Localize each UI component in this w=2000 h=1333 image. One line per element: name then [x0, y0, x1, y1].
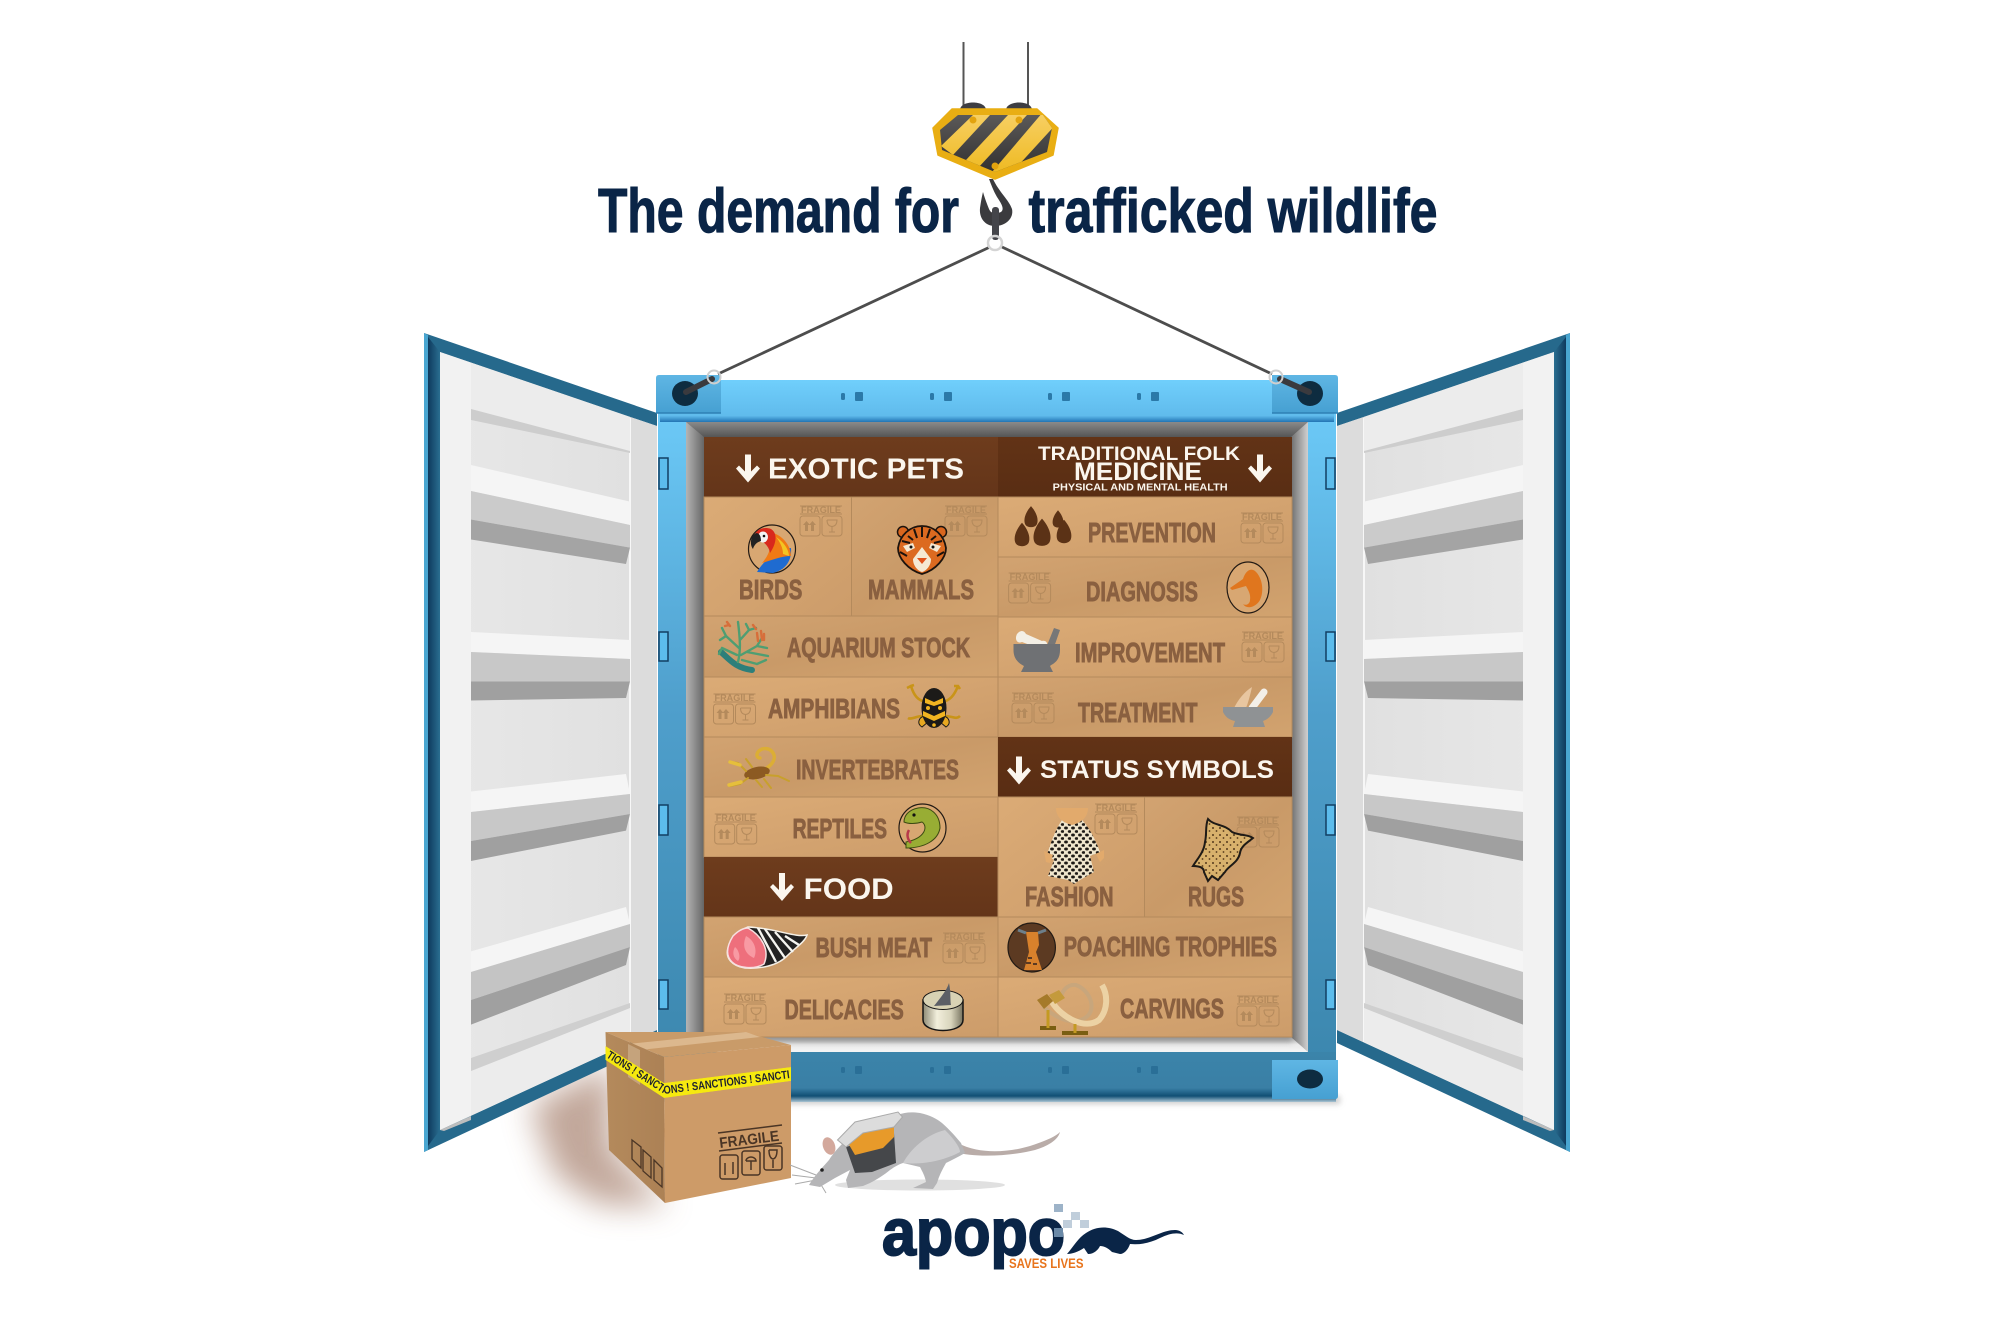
crane hook block — [933, 102, 1060, 180]
carton: invertebrates — [704, 737, 998, 797]
tagline: SAVES LIVES — [1009, 1256, 1084, 1271]
fragile stamp: FRAGILE — [1242, 512, 1282, 523]
heading: status symbols: STATUS SYMBOLS — [1040, 756, 1274, 784]
icon: seahorse — [1227, 562, 1269, 613]
carton: aquarium stock — [704, 616, 998, 677]
label: FASHION — [1025, 881, 1114, 912]
caution tape left: TIONS ! SANCTI — [604, 1049, 668, 1096]
title — [598, 177, 1438, 246]
title: The demand for — [598, 177, 959, 246]
rat shadow — [835, 1180, 1005, 1190]
right post — [1307, 400, 1336, 1080]
label: DIAGNOSIS — [1086, 576, 1198, 607]
fragile stamp — [943, 932, 985, 963]
fragile stamp — [1242, 631, 1284, 662]
icon: mortar with bones — [1014, 628, 1060, 672]
crane hook — [980, 179, 1012, 250]
block body — [933, 109, 1058, 179]
label: POACHING TROPHIES — [1064, 931, 1277, 962]
icon: tiger — [898, 526, 946, 574]
parcel tape — [628, 1032, 760, 1050]
label: AMPHIBIANS — [768, 693, 900, 724]
right container door — [1337, 333, 1570, 1152]
orange pack — [848, 1127, 894, 1155]
lifting slings — [718, 247, 1272, 374]
fragile stamp: FRAGILE — [1096, 803, 1136, 814]
top face — [606, 1032, 791, 1057]
hazard plate — [940, 115, 1052, 172]
fragile stamp — [800, 505, 842, 536]
fragile stamp — [724, 993, 766, 1024]
cardboard box shadow — [530, 1065, 668, 1205]
sling rods and rings at corners — [686, 370, 1309, 392]
label: TREATMENT — [1078, 697, 1198, 728]
label: INVERTEBRATES — [796, 754, 959, 785]
fragile stamp: FRAGILE — [1013, 692, 1053, 703]
left container door — [424, 333, 657, 1152]
whiskers — [790, 1165, 826, 1193]
ear — [820, 1135, 838, 1157]
wordmark: apopo — [882, 1195, 1065, 1269]
carton: carvings — [998, 977, 1292, 1037]
interior walls — [686, 422, 1308, 1052]
fragile stamp: FRAGILE — [1238, 816, 1278, 827]
sill vents — [841, 1066, 1158, 1074]
icon: zebra meat — [727, 927, 807, 968]
carton: birds — [704, 497, 852, 616]
container shadow — [660, 1096, 1340, 1104]
bottom corner casting right — [1272, 1060, 1338, 1099]
shipping container frame — [656, 375, 1340, 1104]
bottom sill — [660, 1052, 1336, 1102]
label: RUGS — [1188, 881, 1244, 912]
icon: giraffe trophy — [1008, 923, 1055, 972]
carton: treatment — [998, 677, 1292, 737]
harness — [846, 1133, 896, 1173]
caution tape right: ONS ! SANCTIONS ! SANCTI — [663, 1069, 790, 1097]
carton: prevention — [998, 497, 1292, 557]
carton: improvement — [998, 617, 1292, 677]
pixels — [1054, 1204, 1089, 1237]
carton: diagnosis — [998, 557, 1292, 617]
title: trafficked wildlife — [1028, 177, 1438, 246]
icon: parrot — [748, 525, 796, 573]
label: AQUARIUM STOCK — [787, 632, 970, 663]
chest shade — [903, 1130, 960, 1163]
fragile stamp: FRAGILE — [946, 505, 986, 516]
hinges — [659, 458, 1335, 1009]
label: DELICACIES — [784, 994, 904, 1025]
heading: traditional folk medicine: MEDICINE — [1074, 458, 1202, 486]
carton: amphibians — [704, 677, 998, 737]
icon: scorpion — [729, 749, 789, 788]
fragile stamp — [715, 813, 757, 844]
icon: poison dart frog — [907, 685, 960, 728]
carton: rugs — [1144, 797, 1292, 917]
fragile stamp — [1009, 572, 1051, 603]
fragile stamp: FRAGILE — [1010, 572, 1050, 583]
clear cover — [838, 1112, 902, 1147]
pulleys — [960, 102, 1032, 110]
fragile stamp — [1237, 995, 1279, 1026]
fragile stamp: FRAGILE — [714, 693, 754, 704]
APOPO rat with vest — [790, 1112, 1060, 1193]
label: MAMMALS — [868, 574, 974, 605]
fragile stamp: FRAGILE — [725, 993, 765, 1004]
APOPO logo — [882, 1195, 1184, 1271]
cardboard box — [604, 1032, 791, 1203]
heading: traditional folk medicine: TRADITIONAL FOLK — [1038, 444, 1240, 465]
heading: status symbols — [998, 737, 1292, 797]
crane cables — [964, 42, 1028, 109]
fragile mark — [718, 1125, 782, 1179]
fragile stamp: FRAGILE — [716, 813, 756, 824]
fragile stamp: FRAGILE — [944, 932, 984, 943]
tail — [955, 1132, 1060, 1156]
carton: delicacies — [704, 977, 998, 1037]
icon: shark fin can — [923, 983, 963, 1030]
heading: exotic pets — [704, 437, 998, 497]
carton: fashion — [998, 797, 1144, 917]
label: IMPROVEMENT — [1075, 637, 1225, 668]
caution tape left — [604, 1046, 668, 1098]
fragile stamp — [1012, 692, 1054, 723]
heading: exotic pets: EXOTIC PETS — [768, 453, 964, 485]
eye — [820, 1168, 824, 1172]
icon: seeds — [1015, 506, 1071, 546]
icon: leopard rug — [1193, 819, 1253, 881]
panel: carton stack — [704, 437, 1292, 1037]
rat silhouette — [1067, 1227, 1184, 1254]
fragile mark: FRAGILE — [718, 1128, 780, 1152]
heading: food: FOOD — [804, 873, 894, 906]
top beam — [660, 380, 1334, 422]
label: REPTILES — [793, 813, 887, 844]
icon: coral — [719, 622, 768, 670]
fragile stamp: FRAGILE — [1238, 995, 1278, 1006]
fragile stamp — [1095, 803, 1137, 834]
carton: poaching trophies — [998, 917, 1292, 977]
right face — [664, 1045, 791, 1203]
label: CARVINGS — [1120, 993, 1224, 1024]
heading: food — [704, 857, 998, 917]
left post — [658, 400, 687, 1080]
top corner casting right — [1272, 375, 1338, 413]
label: BUSH MEAT — [816, 932, 932, 963]
icon: mortar with pestle — [1223, 687, 1273, 727]
rivets — [970, 116, 1022, 170]
body — [809, 1112, 965, 1189]
carton: mammals — [852, 497, 998, 616]
carton shadow — [704, 1036, 1292, 1042]
left face — [606, 1032, 665, 1203]
fragile stamp — [714, 693, 756, 724]
top corner casting left — [656, 375, 721, 413]
side handling marks — [632, 1140, 662, 1187]
icon: cobra — [899, 804, 946, 852]
fragile stamp — [1237, 816, 1279, 847]
icon: carved horns — [1037, 985, 1106, 1033]
label: PREVENTION — [1088, 517, 1216, 548]
top beam vents — [841, 392, 1159, 401]
fragile stamp — [945, 505, 987, 536]
carton: bush meat — [704, 917, 998, 977]
icon: leopard coat — [1044, 808, 1104, 884]
fragile stamp — [1241, 512, 1283, 543]
label: BIRDS — [739, 574, 802, 605]
heading: traditional folk medicine: PHYSICAL AND MENTAL HEALTH — [1053, 482, 1228, 494]
carton: reptiles — [704, 797, 998, 857]
heading: traditional folk medicine — [998, 437, 1292, 497]
fragile stamp: FRAGILE — [1243, 631, 1283, 642]
fragile stamp: FRAGILE — [801, 505, 841, 516]
